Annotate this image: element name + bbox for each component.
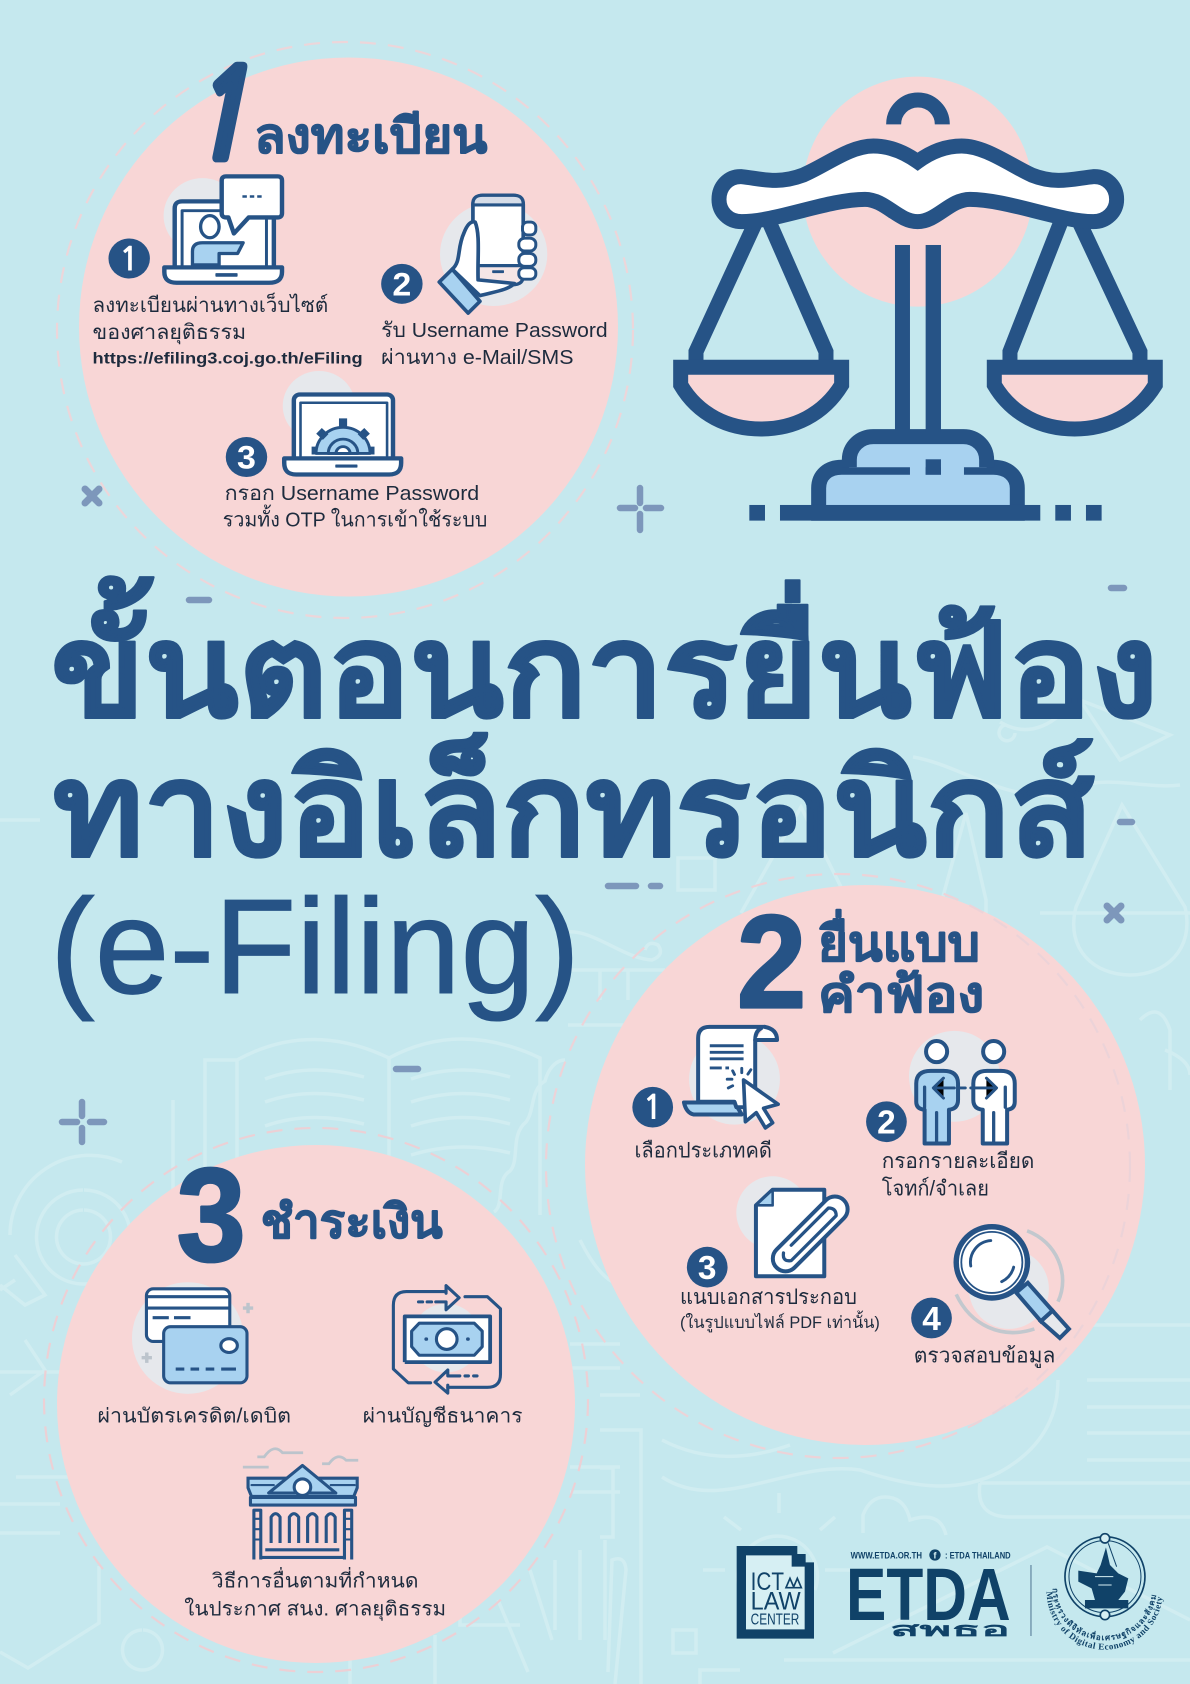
text: receive username password: ผ่านทาง e-Mail/SMS	[381, 346, 574, 369]
text: bank account: ผ่านบัญชีธนาคาร	[363, 1405, 523, 1427]
badge 1	[632, 1087, 673, 1128]
heading: step 1: ลงทะเบียน	[254, 110, 488, 163]
badge 2: 2	[392, 267, 411, 303]
logo: Ministry of Digital Economy and Society seal: Ministry of Digital Economy and Society	[1046, 1591, 1164, 1650]
text: register via court website: ของศาลยุติธรรม	[93, 321, 246, 345]
text: receive username password: รับ Username Password	[381, 319, 608, 342]
background line art	[0, 700, 1190, 1684]
logo: ETDA: สพธอ	[890, 1620, 1010, 1641]
main title: (e-Filing)	[50, 871, 580, 1022]
text: select case type: เลือกประเภทคดี	[635, 1139, 772, 1162]
heading: step 2: ยื่นแบบ	[818, 909, 980, 972]
text: receive username password	[381, 319, 608, 369]
logo: ICT Law Center	[737, 1546, 814, 1639]
main title	[50, 575, 1158, 1022]
main title: ทางอิเล็กทรอนิกส์	[53, 732, 1095, 883]
text: enter username password and OTP: กรอก Username Password	[225, 482, 479, 505]
illustration: scales of justice	[681, 77, 1155, 521]
heading: step 2: คำฟ้อง	[818, 969, 984, 1023]
icon: bank transfer money	[393, 1286, 500, 1393]
heading: step 1	[188, 55, 488, 177]
text: enter username password and OTP: รวมทั้ง OTP ในการเข้าใช้ระบบ	[223, 504, 487, 532]
badge 2	[866, 1101, 907, 1142]
text: register via court website	[93, 291, 363, 367]
badge 3: 3	[237, 440, 256, 477]
heading: step 2: 2	[737, 888, 806, 1035]
text: enter plaintiff details: กรอกรายละเอียด	[882, 1150, 1034, 1173]
heading: step 2	[737, 888, 984, 1035]
badge 1: 1	[643, 1091, 663, 1124]
panel: step 1 register	[57, 42, 633, 618]
logo: ETDA: : ETDA THAILAND	[945, 1551, 1011, 1561]
logo: Ministry of Digital Economy and Society seal	[1046, 1532, 1164, 1650]
logo: ICT Law Center: LAW	[751, 1588, 801, 1616]
text: other methods per court announcement: วิธีการอื่นตามที่กำหนด	[212, 1567, 419, 1593]
heading: step 3	[177, 1142, 443, 1290]
text: attach documents	[680, 1286, 880, 1333]
icon: two people	[909, 1031, 1015, 1144]
text: attach documents: แนบเอกสารประกอบ	[680, 1286, 857, 1309]
text: verify information: ตรวจสอบข้อมูล	[914, 1345, 1055, 1369]
heading: step 3: 3	[177, 1142, 246, 1290]
badge 3: 3	[698, 1250, 717, 1287]
text: credit or debit card: ผ่านบัตรเครดิต/เดบิต	[98, 1405, 291, 1427]
text: enter plaintiff details: โจทก์/จำเลย	[882, 1177, 989, 1201]
heading: step 1: 1	[188, 55, 249, 177]
text: register via court website: https://efiling3.coj.go.th/eFiling	[93, 351, 363, 367]
text: other methods per court announcement	[184, 1567, 446, 1621]
panel: step 2 file complaint	[546, 874, 1145, 1458]
badge 2	[381, 264, 423, 304]
badge 3	[687, 1247, 728, 1287]
badge 3	[226, 437, 267, 477]
icon: credit cards	[132, 1282, 253, 1394]
icon: laptop with speech bubble	[164, 176, 282, 283]
text: enter username password and OTP	[223, 482, 487, 532]
icon: document with paperclip	[736, 1176, 853, 1277]
logo: ICT Law Center: CENTER	[751, 1611, 799, 1628]
logo: ETDA: WWW.ETDA.OR.TH	[851, 1551, 922, 1561]
logo: ICT Law Center: ICT	[751, 1568, 784, 1596]
decorative marks	[62, 488, 1132, 1142]
text: attach documents: (ในรูปแบบไฟล์ PDF เท่านั้น)	[680, 1310, 880, 1333]
icon: court building	[243, 1449, 358, 1559]
icon: scroll and cursor	[684, 1027, 780, 1128]
main title: ขั้นตอนการยื่นฟ้อง	[51, 575, 1158, 744]
badge 4	[911, 1298, 952, 1338]
badge 1	[108, 238, 150, 278]
badge 4: 4	[922, 1301, 941, 1338]
logo: Ministry of Digital Economy and Society seal: กระทรวงดิจิทัลเพื่อเศรษฐกิจและสังคม	[1052, 1588, 1156, 1640]
panel: step 3 payment	[44, 1128, 588, 1672]
text: enter plaintiff details	[882, 1150, 1034, 1201]
icon: laptop with gear	[283, 371, 401, 474]
icon: magnifying glass	[956, 1227, 1069, 1338]
text: other methods per court announcement: ในประกาศ สนง. ศาลยุติธรรม	[184, 1597, 446, 1621]
logo: ETDA: f	[933, 1551, 937, 1561]
heading: step 3: ชำระเงิน	[261, 1195, 443, 1247]
badge 2: 2	[877, 1105, 896, 1142]
icon: hand holding phone	[439, 195, 547, 313]
logos footer	[736, 1532, 1164, 1650]
text: register via court website: ลงทะเบียนผ่านทางเว็บไซต์	[93, 291, 328, 317]
badge 1: 1	[119, 243, 140, 275]
logo: ETDA: ETDA	[846, 1553, 1011, 1636]
